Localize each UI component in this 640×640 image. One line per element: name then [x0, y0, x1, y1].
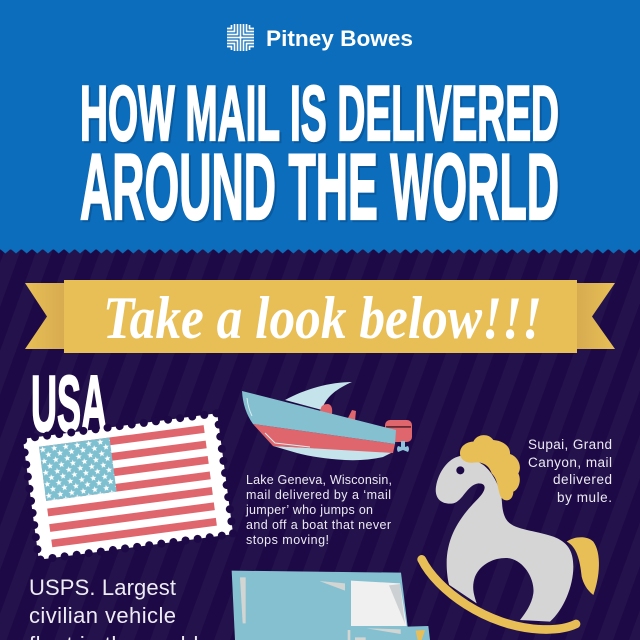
horse rocker — [422, 559, 576, 629]
ribbon main band — [64, 280, 577, 353]
boat red stripe — [253, 424, 395, 453]
boat windshield — [285, 382, 352, 410]
logo wordmark: Pitney Bowes — [266, 26, 413, 51]
logo: Pitney Bowes — [227, 24, 413, 51]
horse tail — [567, 537, 599, 595]
ribbon right tail — [577, 283, 615, 349]
horse mane — [460, 435, 520, 500]
text: Lake Geneva caption: stops moving! — [246, 533, 329, 547]
truck headlight — [416, 630, 425, 640]
boat lower hull — [273, 446, 393, 460]
text: USA — [31, 359, 107, 448]
boat highlights — [247, 398, 310, 447]
text: Lake Geneva caption: jumper’ who jumps on — [245, 503, 373, 517]
title — [80, 69, 561, 241]
banner ribbon — [25, 280, 615, 353]
truck window — [351, 581, 407, 626]
ribbon left tail — [25, 283, 64, 349]
text: Lake Geneva caption: mail delivered by a ‘mail — [246, 488, 391, 502]
text: Supai caption: Canyon, mail — [528, 455, 612, 470]
truck body — [232, 571, 430, 640]
horse eye — [456, 466, 464, 474]
boat motor — [385, 420, 412, 452]
banner text: Take a look below!!! — [103, 285, 542, 351]
text: Supai caption: by mule. — [557, 490, 612, 505]
flag stripes — [39, 425, 217, 547]
truck window reflection — [389, 584, 405, 624]
flag canton with stars — [39, 438, 117, 501]
text: Lake Geneva caption: Lake Geneva, Wisconsin, — [246, 473, 392, 487]
background: dark striped panel — [0, 245, 640, 640]
text: Supai caption — [528, 437, 612, 505]
boat seat and post — [320, 404, 356, 421]
text: USPS description — [29, 575, 205, 640]
text: Supai caption: delivered — [553, 472, 612, 487]
truck highlights — [240, 577, 401, 640]
icon: boat — [242, 382, 412, 460]
horse body — [436, 455, 573, 622]
icon: rocking horse mule — [422, 435, 599, 629]
icon: Pitney Bowes cross mark — [227, 24, 254, 51]
text: Lake Geneva caption — [245, 473, 392, 547]
text: Supai caption: Supai, Grand — [528, 437, 612, 452]
text: USPS description: civilian vehicle — [29, 603, 176, 628]
icon: mail truck — [232, 571, 430, 640]
boat blue hull — [242, 391, 396, 444]
text: Lake Geneva caption: and off a boat that never — [246, 518, 391, 532]
header: blue panel with sawtooth edge — [0, 0, 640, 254]
text: USPS description: USPS. Largest — [29, 575, 176, 600]
icon: US flag postage stamp — [23, 413, 233, 560]
